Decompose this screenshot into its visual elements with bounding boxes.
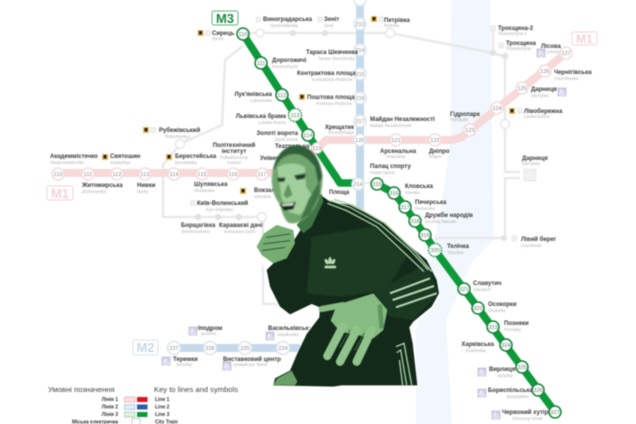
ring finger bbox=[327, 327, 343, 356]
station names: centre and right: Telychka bbox=[447, 250, 464, 255]
station names: centre and right: Телічка bbox=[447, 244, 470, 250]
fist finger creases bbox=[262, 234, 290, 251]
station names: lower green line: Osokorky bbox=[488, 308, 507, 313]
station names: top area: Зеніт bbox=[324, 17, 339, 23]
line label M1 right: M1 bbox=[576, 32, 593, 46]
station names: west: Університет bbox=[260, 156, 296, 162]
line label M1 left bbox=[47, 186, 73, 201]
station names: west: Shuliavska bbox=[194, 188, 215, 193]
stations on red line: 124 bbox=[492, 106, 502, 112]
station names: lower green line: Slavutych bbox=[473, 287, 492, 292]
station names: centre and right: Кловська bbox=[405, 184, 434, 190]
legend heading Ukrainian: Умовні позначення bbox=[48, 385, 115, 394]
station names: west: Borshchahivka bbox=[182, 229, 210, 234]
station names: top area: Tarasa Shevchenka bbox=[318, 56, 355, 61]
stations on blue line bbox=[168, 0, 366, 354]
stations on blue line: 225 bbox=[240, 346, 250, 352]
station names: west bbox=[50, 127, 296, 234]
station names: top area: Dorohozhychi bbox=[272, 64, 298, 69]
stations on green line: 112 bbox=[278, 93, 286, 99]
sleeve bbox=[373, 263, 438, 320]
station names: top area: Poshtova Ploshcha bbox=[316, 101, 353, 106]
stations on blue line: 226 bbox=[205, 346, 215, 352]
station names: centre and right: Khreshchatyk bbox=[329, 130, 355, 135]
middle finger bbox=[340, 330, 357, 362]
back of hand bbox=[331, 293, 387, 338]
station names: lower green line: Vyrlytsia bbox=[497, 373, 513, 378]
line M3 green bbox=[243, 34, 555, 412]
stations on red line: 113 bbox=[141, 172, 149, 178]
station names: top area: Zenit bbox=[324, 23, 334, 28]
stations on green line bbox=[237, 28, 561, 418]
station names: blue line south: Теремки bbox=[173, 357, 198, 363]
mouth bbox=[279, 202, 296, 211]
station names: top area: Kontraktova Ploshcha bbox=[312, 77, 353, 82]
stations on green line: 111 bbox=[257, 61, 265, 67]
stations on red line: 116 bbox=[229, 172, 237, 178]
station names: left bank: Livyi Bereh bbox=[521, 243, 542, 248]
station names: west: Rubezhivskyi bbox=[165, 134, 190, 139]
stations on red line: 117 bbox=[258, 172, 266, 178]
station names: centre and right: Палац спорту bbox=[370, 164, 411, 170]
station names: west: інститут bbox=[222, 149, 246, 155]
station names: west: Рубежівський bbox=[159, 127, 200, 134]
pale transfer icons bbox=[150, 17, 536, 241]
station names: centre and right: Arsenalna bbox=[386, 154, 406, 159]
stations on green line: 114 bbox=[304, 133, 312, 139]
jacket and trousers bbox=[267, 193, 439, 387]
station names: west: Beresteiska bbox=[175, 160, 198, 165]
stations on green line: 319 bbox=[420, 233, 430, 239]
station names: blue line south: Іподром bbox=[198, 326, 223, 332]
link between green segments bbox=[358, 182, 377, 184]
station names: west: Nyvky bbox=[137, 189, 149, 194]
station names: left bank: Троєщина-2 bbox=[498, 26, 534, 32]
station names: left bank: Лісова bbox=[541, 44, 561, 50]
stations on green line: 318 bbox=[410, 219, 420, 225]
legend row line 1: Line 1 bbox=[155, 397, 170, 403]
stations on blue line: 214 bbox=[355, 48, 365, 54]
station names: top area: Петрівка bbox=[384, 18, 411, 24]
station names: blue line south: Vasylkivska bbox=[277, 332, 299, 337]
stations on blue line: 215 bbox=[355, 72, 365, 78]
jacket highlights bbox=[307, 227, 407, 297]
station names: west: Sviatoshyn bbox=[110, 160, 131, 165]
station names: centre and right: Palats Sportu bbox=[370, 170, 396, 175]
trouser stripes bbox=[396, 343, 412, 385]
head with soft shading bbox=[272, 145, 322, 223]
station names: west: Житомирська bbox=[81, 183, 123, 189]
legend row line 2: Лінія 2 bbox=[102, 404, 118, 410]
trefoil logo bbox=[324, 257, 336, 268]
stations on red line bbox=[52, 47, 572, 180]
station names: top area: Тараса Шевченка bbox=[306, 50, 359, 56]
legend row city train bbox=[72, 418, 178, 424]
station names: blue line south bbox=[173, 326, 312, 367]
stations on blue line: 224 bbox=[278, 346, 288, 352]
station names: lower green line: Вирлиця bbox=[489, 367, 516, 373]
station names: left bank: Дарниця bbox=[522, 156, 548, 162]
hair bbox=[273, 145, 322, 185]
stations on green line: 323 bbox=[488, 325, 498, 331]
station names: top area: Syrets bbox=[212, 36, 224, 41]
station names: west: Politekhnichnyi bbox=[220, 155, 248, 160]
station names: left bank: Darnytsia bbox=[531, 93, 549, 98]
station names: centre and right: Klovska bbox=[405, 190, 420, 195]
stations on green line: 320 bbox=[430, 248, 440, 254]
station names: top area: Поштова площа bbox=[307, 95, 355, 101]
station names: lower green line: Kharkivska bbox=[466, 348, 487, 353]
line M2 blue vertical bbox=[356, 0, 364, 215]
station names: blue line south: Виставковий центр bbox=[223, 356, 281, 363]
station names: west: Instytut bbox=[227, 160, 242, 165]
station names: blue line south: Ipodrom bbox=[201, 331, 217, 336]
station names: west: Zhytomyrska bbox=[82, 189, 107, 194]
finger separators bbox=[340, 330, 364, 350]
station names: west: Київ-Волинський bbox=[197, 200, 248, 207]
station names: top area: Виноградарська bbox=[263, 17, 313, 23]
stations on green line: 316 bbox=[389, 191, 399, 197]
station names: west: Політехнічний bbox=[213, 142, 256, 149]
station names: lower green line: Славутич bbox=[473, 281, 502, 287]
city train stations bbox=[176, 28, 510, 241]
face highlight bbox=[277, 163, 314, 215]
stations on green line: 326 bbox=[533, 388, 543, 394]
station names: lower green line: Boryspilska bbox=[507, 394, 529, 399]
station names: left bank: Троєщина bbox=[506, 41, 536, 47]
station names: left bank: Lisova bbox=[547, 49, 560, 54]
legend row line 1: Лінія 1 bbox=[102, 397, 118, 403]
station names: centre and right: Дніпро bbox=[429, 149, 450, 155]
station names: left bank: Chernihivska bbox=[554, 76, 579, 81]
stations on blue line: 217 bbox=[355, 119, 365, 125]
station names: west: Kyiv-Volynskyi bbox=[206, 207, 233, 212]
station names: left bank: Дарниця bbox=[531, 87, 557, 93]
stations on red line: 114 bbox=[170, 172, 178, 178]
station names: west: Вокзальна bbox=[254, 188, 286, 194]
station names: centre and right: Гідропарк bbox=[450, 112, 480, 118]
stations on red line: 119 bbox=[313, 146, 321, 152]
raised fist bbox=[257, 225, 295, 263]
station names: top area: Львівська брама bbox=[236, 113, 287, 120]
station names: centre and right: Dnipro bbox=[429, 154, 442, 159]
station names: lower green line: Бориспільська bbox=[488, 388, 533, 394]
station names: west: Берестейська bbox=[175, 153, 217, 160]
station names: centre and right: Pecherska bbox=[415, 206, 435, 211]
line label M3 bbox=[212, 11, 238, 26]
station names: blue line south: Васильківська bbox=[268, 326, 312, 332]
nose shadow bbox=[283, 183, 293, 198]
lower hand bbox=[322, 293, 387, 362]
station names: top area: Театральна bbox=[275, 144, 310, 150]
line label M3: M3 bbox=[216, 11, 234, 26]
legend row line 3 bbox=[102, 412, 170, 418]
legend row line 2: Line 2 bbox=[155, 404, 170, 410]
station names: lower green line: Pozniaky bbox=[504, 327, 522, 332]
station names: centre and right: Дружби народів bbox=[425, 212, 473, 219]
thumb bbox=[322, 305, 343, 309]
station names: top area: Petrivka bbox=[384, 23, 400, 28]
wheelchair icons bbox=[162, 48, 566, 420]
station names: west: Борщагівка bbox=[181, 223, 216, 229]
stations on green line: 317 bbox=[400, 205, 410, 211]
station names: centre and right: Арсенальна bbox=[380, 149, 417, 155]
stations on red line: 115 bbox=[198, 172, 206, 178]
line label M1 right bbox=[572, 32, 597, 46]
stations on green line: 324 bbox=[501, 343, 511, 349]
station names: lower green line: Chervonyi Khutir bbox=[512, 416, 544, 421]
stations on red line: 123 bbox=[465, 128, 475, 134]
legend bbox=[48, 385, 238, 424]
station names: left bank: Лівий берег bbox=[521, 236, 557, 243]
station names: top area: Lvivska Brama bbox=[259, 120, 287, 125]
face bbox=[272, 145, 322, 223]
jaw shadow bbox=[300, 180, 320, 221]
station names: west: Академмістечко bbox=[50, 154, 98, 160]
line M1 red bbox=[58, 53, 566, 173]
station names: top area: Lukianivska bbox=[250, 98, 273, 103]
station names: lower green line: Позняки bbox=[504, 321, 529, 327]
station names: top area: Золоті ворота bbox=[256, 131, 299, 137]
station names: top area: Vynohradarska bbox=[270, 23, 299, 28]
station names: west: Караваєві дачі bbox=[219, 223, 263, 229]
station names: top area: Сирець bbox=[212, 31, 235, 37]
station names: left bank: Чернігівська bbox=[554, 70, 592, 76]
stations on green line: 110 bbox=[239, 32, 247, 38]
legend row line 3: Line 3 bbox=[155, 412, 170, 418]
shoe bbox=[273, 371, 297, 385]
line label M1 left: M1 bbox=[51, 186, 69, 201]
station names: left bank: Лівобережна bbox=[524, 108, 563, 115]
hand shadow bbox=[380, 307, 382, 327]
index finger bbox=[357, 330, 372, 362]
station names: top area: Лук'янівська bbox=[234, 92, 273, 98]
station names: left bank: Livoberezhna bbox=[524, 114, 550, 119]
stations on red line: 111 bbox=[84, 172, 92, 178]
stations on red line: 127 bbox=[561, 51, 571, 57]
station names: west: Akademmistechko bbox=[50, 160, 85, 165]
stations on red line: 122 bbox=[430, 138, 440, 144]
stations on green line: 321 bbox=[459, 287, 469, 293]
stations on green line: 327 bbox=[550, 410, 560, 416]
station names: left bank: Troieshchyna bbox=[506, 46, 532, 51]
stations on green line: 113 bbox=[291, 113, 299, 119]
station names: centre and right: Hidropark bbox=[450, 117, 469, 122]
neck bbox=[297, 193, 323, 233]
white cutout halo bbox=[255, 193, 440, 387]
stations on red line: 110 bbox=[54, 172, 62, 178]
cuff stripes bbox=[390, 278, 437, 307]
stations on blue line: 214 bbox=[353, 182, 363, 188]
station names: left bank bbox=[498, 26, 592, 248]
station names: centre and right: Druzhby Narodiv bbox=[425, 219, 457, 224]
stations on green line: 325 bbox=[517, 365, 527, 371]
train icons bbox=[102, 16, 515, 194]
stations on blue line: 213 bbox=[355, 22, 365, 28]
station names: centre and right bbox=[325, 112, 480, 255]
river bbox=[416, 0, 494, 424]
legend row line 3: Лінія 3 bbox=[102, 412, 118, 418]
station names: centre and right: Майдан Незалежності bbox=[370, 116, 435, 123]
station names: blue line south: Teremky bbox=[176, 362, 193, 367]
station names: centre and right: Maidan Nezalezhnosti bbox=[370, 123, 411, 128]
station names: centre and right: Хрещатик bbox=[325, 125, 354, 131]
city train lines bbox=[163, 28, 520, 304]
station names: left bank: Darnytsia bbox=[522, 161, 540, 166]
station names: centre and right: Площа bbox=[329, 190, 350, 196]
person in green duotone bbox=[255, 145, 440, 387]
station names: lower green line: Червоний хутір bbox=[502, 409, 549, 416]
stations on blue line: 216 bbox=[355, 96, 365, 102]
line M2 blue horizontal bbox=[174, 344, 300, 352]
eyes bbox=[277, 173, 306, 182]
station names: centre and right: Печерська bbox=[415, 200, 447, 206]
fist base bbox=[257, 225, 295, 263]
legend row line 2 bbox=[102, 404, 170, 410]
stations on green line: 322 bbox=[473, 306, 483, 312]
station names: top area: Дорогожичі bbox=[272, 58, 307, 64]
station names: blue line south: Vystavkovyi Tsentr bbox=[233, 362, 268, 367]
station names: top area: Zoloti Vorota bbox=[274, 137, 299, 142]
stations on red line: 126 bbox=[540, 69, 550, 75]
stations on red line: 112 bbox=[113, 172, 121, 178]
stations on red line: 125 bbox=[517, 86, 527, 92]
stations on green line: 315 bbox=[372, 182, 382, 188]
station names: left bank: Troieshchyna-2 bbox=[498, 31, 527, 36]
stations on blue line: 120 bbox=[355, 138, 365, 144]
teeth bbox=[281, 203, 294, 206]
station names: west: Vokzalna bbox=[254, 194, 272, 199]
legend heading English: Key to lines and symbols bbox=[154, 385, 238, 394]
station names: lower green line: Харківська bbox=[461, 342, 495, 348]
station names: west: Святошин bbox=[110, 154, 141, 160]
shoulder stripes bbox=[327, 199, 432, 272]
legend row line 1 bbox=[102, 397, 170, 403]
station names: lower green line bbox=[461, 281, 549, 421]
station names: lower green line: Осокорки bbox=[488, 302, 517, 308]
station names: west: Karavaievi Dachi bbox=[224, 229, 255, 234]
station names: top area: Контрактова площа bbox=[297, 71, 356, 77]
station names: west: Нивки bbox=[137, 183, 156, 189]
stations on red line: 121 bbox=[391, 138, 401, 144]
line label M2: M2 bbox=[136, 340, 155, 355]
stations on blue line: 227 bbox=[169, 346, 179, 352]
station names: top area bbox=[212, 17, 411, 150]
station names: west: Шулявська bbox=[194, 182, 228, 188]
